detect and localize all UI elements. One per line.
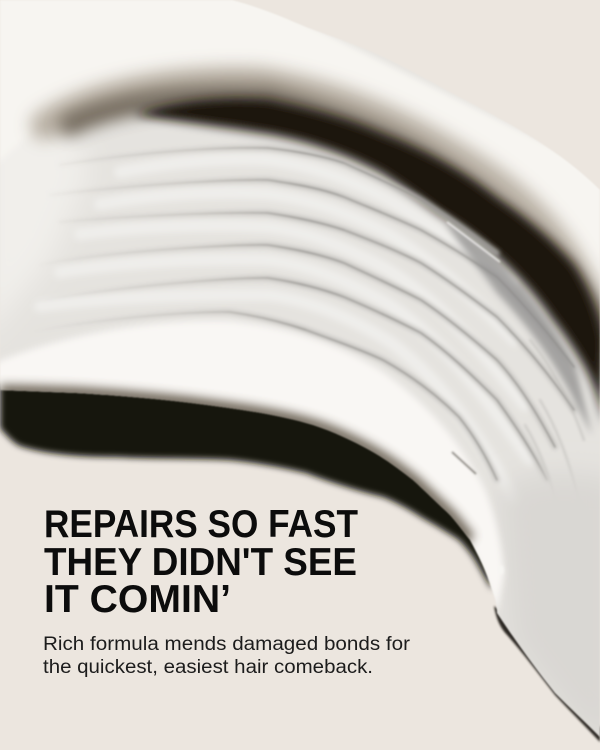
lower right grooves — [524, 340, 585, 472]
headline: REPAIRS SO FAST — [44, 503, 358, 546]
left blend area — [0, 136, 80, 302]
body copy — [43, 634, 411, 678]
body copy: the quickest, easiest hair comeback. — [43, 657, 373, 678]
cut in cream — [452, 452, 476, 474]
tan shading on upper lobe — [45, 81, 600, 330]
brown edge of lower lobe — [0, 391, 470, 540]
body copy: Rich formula mends damaged bonds for — [43, 634, 411, 655]
ridge soft shade — [138, 144, 577, 483]
ridge surfaces — [37, 144, 585, 483]
tail tint — [500, 473, 600, 750]
headline — [44, 503, 358, 621]
lower lobe — [0, 321, 504, 612]
gloss highlight — [447, 222, 500, 262]
gray sheen near crescent — [445, 222, 592, 435]
brown transition above crescent — [70, 96, 600, 365]
headline: THEY DIDN'T SEE — [44, 541, 357, 584]
dark crescent — [135, 98, 600, 425]
drop highlight — [498, 565, 504, 575]
ridge highlights — [40, 159, 530, 500]
headline: IT COMIN’ — [44, 578, 231, 621]
ridge grooves — [174, 146, 575, 481]
shadow under cream — [0, 385, 600, 742]
upper lobe — [0, 0, 600, 292]
